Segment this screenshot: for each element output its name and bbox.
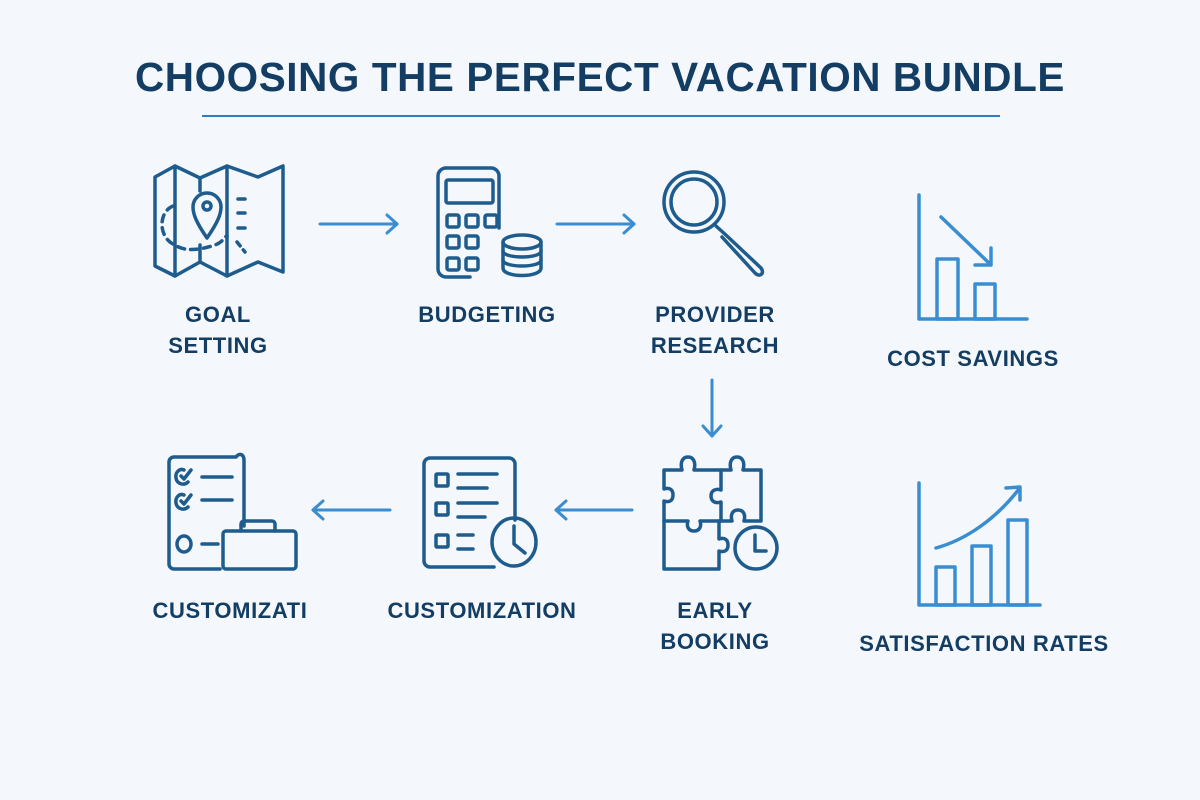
icon: schedule document <box>424 458 536 567</box>
label: goal setting: GOAL <box>185 302 251 327</box>
label: satisfaction rates: SATISFACTION RATES <box>859 631 1109 656</box>
label: early booking: BOOKING <box>660 629 770 654</box>
label: early booking: EARLY <box>677 598 753 623</box>
chart: cost savings <box>919 195 1027 319</box>
icon: magnifier <box>664 172 762 275</box>
title: CHOOSING THE PERFECT VACATION BUNDLE <box>135 54 1065 100</box>
icon: map <box>155 166 283 276</box>
arrow left 2 <box>313 501 390 519</box>
arrow left 1 <box>556 501 632 519</box>
label: provider research: PROVIDER <box>655 302 775 327</box>
label: budgeting: BUDGETING <box>418 302 556 327</box>
icon: calculator <box>438 168 541 277</box>
arrow down <box>703 380 721 436</box>
arrow 1 <box>320 215 397 233</box>
chart: satisfaction rates <box>919 483 1040 605</box>
label: cost savings: COST SAVINGS <box>887 346 1059 371</box>
label: provider research: RESEARCH <box>651 333 779 358</box>
label: goal setting <box>168 302 268 358</box>
label: customizati: CUSTOMIZATI <box>153 598 307 623</box>
label: customization: CUSTOMIZATION <box>387 598 577 623</box>
icon: puzzle with clock <box>664 457 777 569</box>
arrow 2 <box>557 215 634 233</box>
icon: checklist with suitcase <box>169 454 296 569</box>
label: early booking <box>660 598 770 654</box>
label: goal setting: SETTING <box>168 333 268 358</box>
label: provider research <box>651 302 779 358</box>
